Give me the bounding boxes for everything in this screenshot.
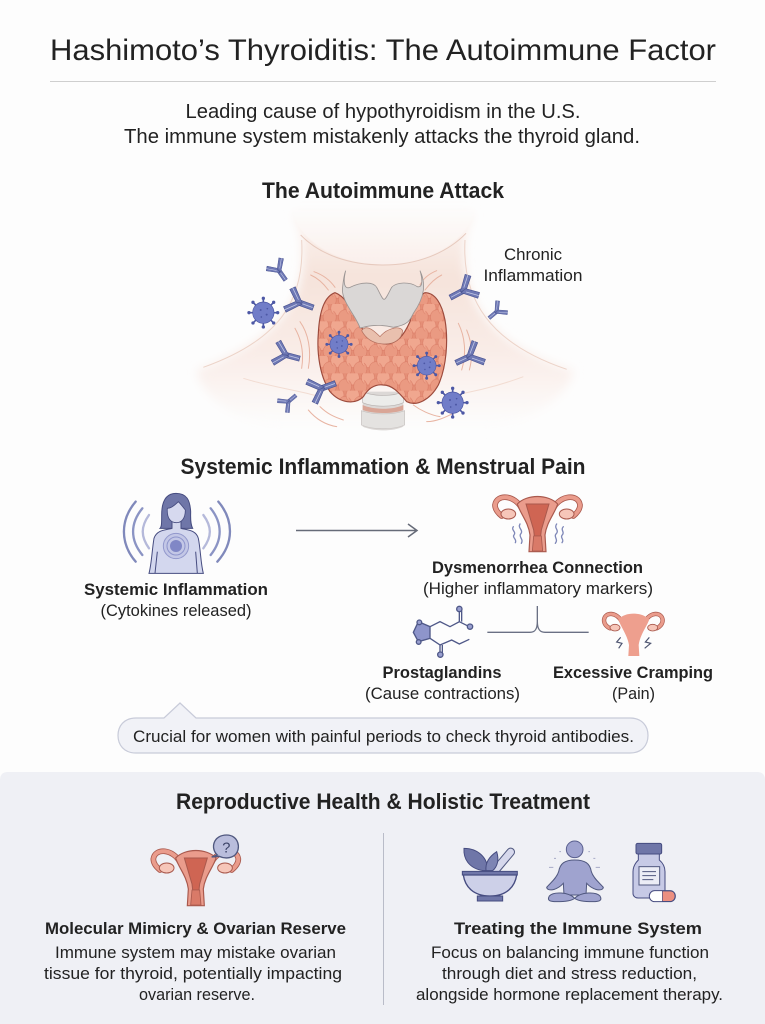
- text: systemic inflammation: (Cytokines released): [100, 601, 252, 620]
- text: systemic inflammation: [84, 580, 268, 620]
- callout: [118, 703, 648, 753]
- heading: the autoimmune attack: The Autoimmune Attack: [262, 178, 505, 203]
- text: dysmenorrhea connection: [423, 558, 653, 598]
- heading: systemic inflammation and menstrual pain: Systemic Inflammation & Menstrual Pain: [180, 454, 586, 479]
- subtitle: Leading cause of hypothyroidism in the U.S.: [186, 101, 580, 123]
- label: chronic inflammation: Chronic: [504, 245, 562, 264]
- text: molecular mimicry: tissue for thyroid, potentially impacting: [44, 964, 342, 983]
- antibodies: [264, 256, 509, 414]
- connector: branching bracket: [487, 606, 589, 632]
- arrow: [296, 524, 417, 537]
- label: chronic inflammation: [484, 245, 582, 285]
- text: prostaglandins: Prostaglandins: [382, 663, 502, 682]
- neck: [197, 210, 573, 427]
- thyroid gland: [318, 293, 447, 403]
- text: excessive cramping: Excessive Cramping: [553, 663, 713, 682]
- text: molecular mimicry: [44, 919, 346, 1004]
- icon: uterus with heat waves: [495, 496, 580, 552]
- text: treating the immune system: alongside hormone replacement therapy.: [416, 985, 723, 1004]
- label: chronic inflammation: Inflammation: [484, 266, 582, 285]
- text: prostaglandins: [365, 663, 520, 703]
- trachea: [361, 392, 405, 430]
- icon: uterus with cramp bolts: [604, 614, 663, 656]
- text: dysmenorrhea connection: (Higher inflammatory markers): [423, 579, 653, 598]
- subtitle: The immune system mistakenly attacks the thyroid gland.: [124, 126, 640, 148]
- text: treating the immune system: Treating the Immune System: [454, 919, 702, 938]
- subtitle: [124, 101, 640, 148]
- text: molecular mimicry: ovarian reserve.: [139, 985, 255, 1004]
- icon: meditating figure: [547, 841, 603, 902]
- text: dysmenorrhea connection: Dysmenorrhea Connection: [432, 558, 643, 577]
- text: treating the immune system: Focus on balancing immune function: [431, 943, 709, 962]
- text: treating the immune system: through diet and stress reduction,: [442, 964, 697, 983]
- text: molecular mimicry: Immune system may mistake ovarian: [55, 943, 336, 962]
- callout: Crucial for women with painful periods to check thyroid antibodies.: [133, 727, 634, 746]
- inflammation lines: [295, 271, 472, 427]
- text: excessive cramping: [553, 663, 713, 703]
- text: excessive cramping: (Pain): [612, 684, 655, 703]
- virus particles: [247, 297, 469, 419]
- icon: uterus with question bubble: ?: [222, 840, 230, 856]
- illustration: thyroid under immune attack: [197, 210, 573, 430]
- panel heading: Reproductive Health & Holistic Treatment: [176, 789, 591, 814]
- text: molecular mimicry: Molecular Mimicry & Ovarian Reserve: [45, 919, 346, 938]
- panel: reproductive health and holistic treatment: [0, 772, 765, 1024]
- icon: mortar and herbs: [462, 848, 517, 901]
- title: Hashimoto’s Thyroiditis: The Autoimmune Factor: [50, 34, 716, 67]
- thyroid cartilage: [342, 271, 424, 344]
- icon: medicine bottle and pill: [633, 843, 675, 902]
- icon: prostaglandin molecule: [413, 606, 473, 657]
- text: systemic inflammation: Systemic Inflammation: [84, 580, 268, 599]
- text: treating the immune system: [416, 919, 723, 1004]
- icon: woman with radiating inflammation: [124, 493, 230, 573]
- text: prostaglandins: (Cause contractions): [365, 684, 520, 703]
- icon: uterus with question bubble: [153, 835, 238, 906]
